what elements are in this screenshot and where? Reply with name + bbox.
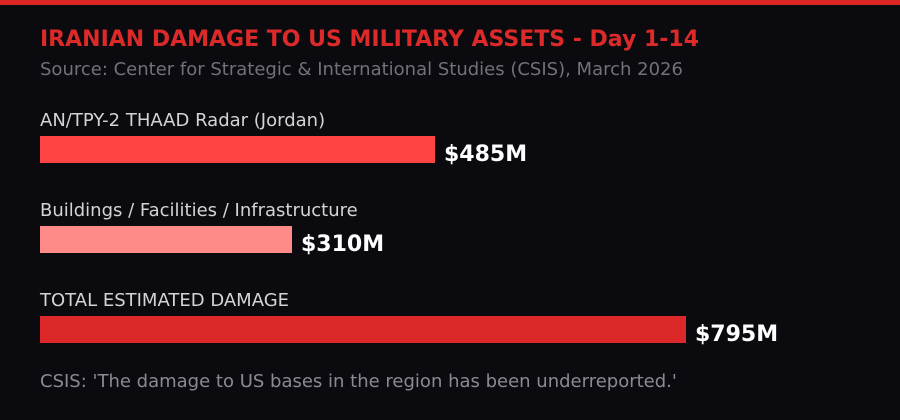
label: TOTAL ESTIMATED DAMAGE bbox=[40, 290, 289, 311]
title: IRANIAN DAMAGE TO US MILITARY ASSETS - Day 1-14 bbox=[40, 27, 699, 52]
top accent bar bbox=[0, 0, 900, 5]
bar bbox=[40, 226, 292, 253]
subtitle: Source: Center for Strategic & International Studies (CSIS), March 2026 bbox=[40, 59, 683, 80]
bar bbox=[40, 136, 435, 163]
value: $795M bbox=[695, 322, 778, 347]
bar row: total bbox=[40, 290, 778, 347]
quote footer: CSIS: 'The damage to US bases in the region has been underreported.' bbox=[40, 371, 677, 392]
bar row: THAAD radar bbox=[40, 110, 527, 167]
bar row: buildings bbox=[40, 200, 384, 257]
label: Buildings / Facilities / Infrastructure bbox=[40, 200, 358, 221]
value: $310M bbox=[301, 232, 384, 257]
label: AN/TPY-2 THAAD Radar (Jordan) bbox=[40, 110, 325, 131]
bar bbox=[40, 316, 686, 343]
value: $485M bbox=[444, 142, 527, 167]
